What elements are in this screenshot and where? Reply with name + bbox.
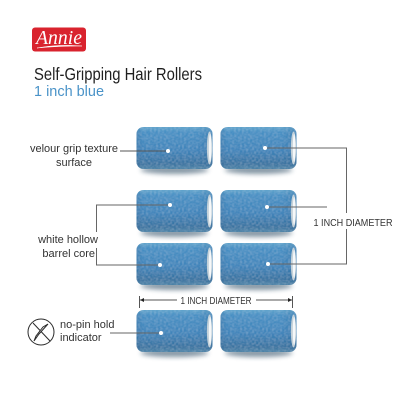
callout: velour grip texture surface: surface [56, 157, 92, 169]
dimension: bottom 1 inch diameter [140, 295, 292, 308]
callout: white hollow barrel core: barrel core [42, 248, 95, 260]
icon: no pin [28, 319, 54, 345]
callout: right 1 inch diameter [263, 146, 393, 266]
callout: velour grip texture surface: velour grip texture [30, 143, 118, 155]
roller row 1 right [220, 127, 296, 174]
callout: velour grip texture surface [30, 143, 170, 169]
roller row 4 left [136, 310, 212, 357]
roller row 1 left [136, 127, 212, 174]
callout: no-pin hold indicator: indicator [60, 332, 102, 344]
callout: white hollow barrel core [37, 203, 172, 267]
callout: no-pin hold indicator [60, 319, 163, 344]
roller row 3 right [220, 243, 296, 290]
logo: Annie: Annie [34, 27, 82, 49]
callout: white hollow barrel core: white hollow [37, 234, 98, 246]
callout: right 1 inch diameter: 1 INCH DIAMETER [314, 217, 393, 229]
roller row 2 left [136, 190, 212, 237]
roller row 4 right [220, 310, 296, 357]
dimension: bottom 1 inch diameter: 1 INCH DIAMETER [180, 295, 252, 307]
title: Self-Gripping Hair Rollers [34, 64, 202, 84]
roller row 3 left [136, 243, 212, 290]
callout: no-pin hold indicator: no-pin hold [60, 319, 114, 331]
roller row 2 right [220, 190, 296, 237]
subtitle: 1 inch blue [34, 84, 104, 100]
